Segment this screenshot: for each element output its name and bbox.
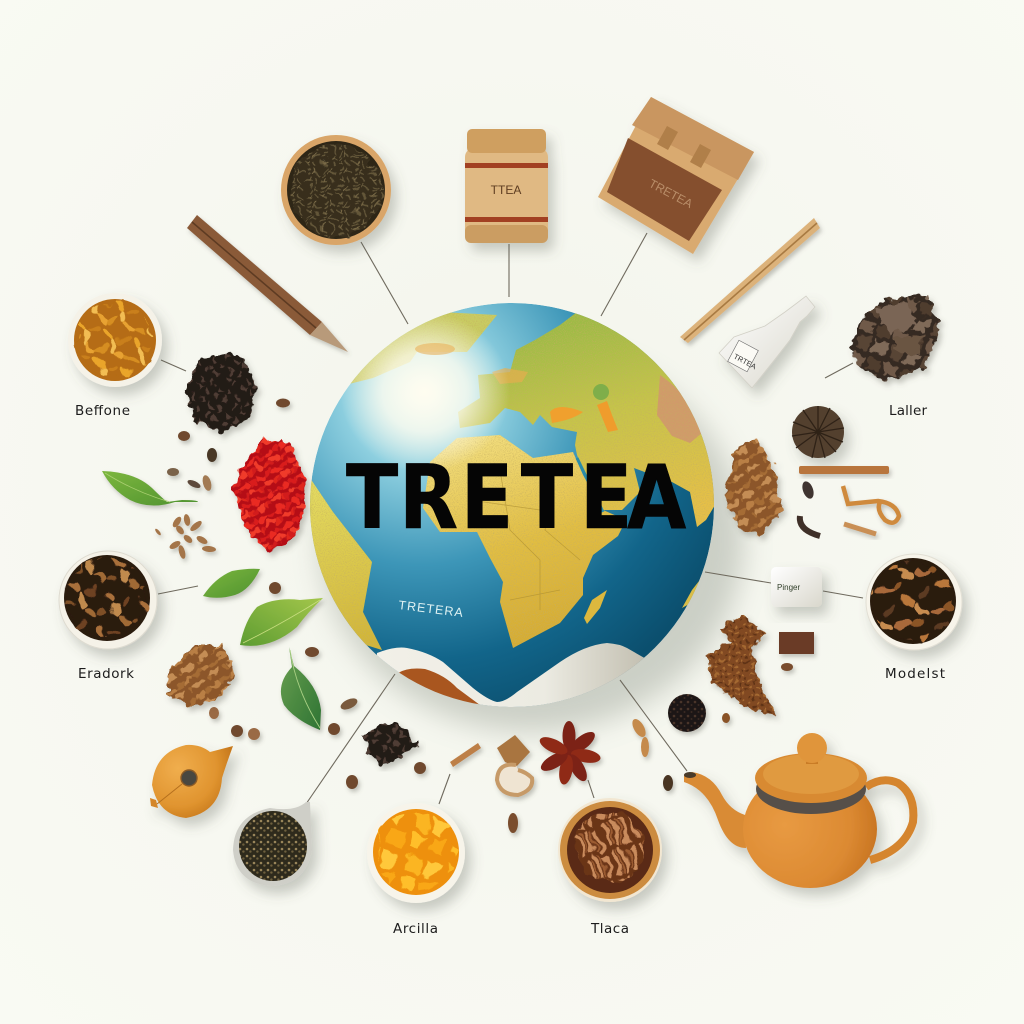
ground tea pile (706, 615, 776, 716)
sticks: right wooden pair (680, 218, 820, 343)
package: tea box (598, 97, 754, 254)
cinnamon stick (799, 466, 889, 474)
knob (806, 750, 818, 764)
tin: small white: Pinger (777, 583, 800, 592)
clove upper (800, 480, 816, 500)
label: Tlaca: Tlaca (590, 921, 629, 937)
tan highlands (657, 375, 703, 443)
orange patch: Caspian (597, 401, 618, 432)
Red Sea (577, 458, 603, 512)
spice: star anise (537, 721, 602, 786)
jar: tea jar (465, 129, 548, 243)
bottle: white (719, 296, 815, 388)
wrap inner brown (399, 668, 480, 704)
jar: tea jar: TTEA (491, 183, 521, 197)
small ginger (844, 524, 876, 534)
handle (866, 780, 913, 860)
herb: dark cluster bottom (365, 722, 418, 765)
cinnamon and spices: right cluster (726, 406, 899, 536)
polar highlight (344, 316, 507, 466)
continent: South America (310, 480, 382, 650)
leaf: small (203, 569, 260, 598)
orange patches: Europe (492, 368, 528, 384)
island: Madagascar (584, 590, 607, 624)
globe shadow (320, 348, 744, 732)
herb: brown flakes (726, 440, 783, 535)
label text: Beffone (75, 403, 130, 419)
gourd: orange teapot small (150, 745, 233, 818)
spice: almond pieces (630, 717, 649, 757)
leaf: medium (240, 598, 323, 646)
herb: dark tea pile left (186, 352, 258, 433)
spout (684, 772, 746, 848)
bowl: dark tea, top (281, 135, 391, 245)
orange patch: Black Sea area (550, 407, 583, 423)
bowl: dark spice right (866, 554, 962, 650)
continent: North America and Greenland (345, 312, 497, 385)
bowl: mango slices (367, 803, 465, 903)
spice: ginger pieces (497, 735, 532, 795)
bowl: golden tea (68, 293, 162, 387)
seeds: scattered coffee-like beans (167, 398, 793, 833)
package: tea box: TRETEA (647, 176, 695, 211)
orange patch: Greenland (415, 343, 455, 355)
clove lower (800, 516, 820, 536)
stick: small cinnamon (450, 743, 481, 767)
leaf: dark lower (281, 647, 321, 730)
title: TRETEA (346, 447, 686, 549)
herb: dark bark pile right (850, 294, 940, 380)
stick: left wooden pencil (187, 215, 348, 352)
spice: dark pinecone (792, 406, 844, 458)
connector lines (158, 233, 863, 804)
ginger root (843, 486, 899, 523)
label group: Beffone (68, 293, 162, 419)
bottle: white: TRTEA (732, 352, 758, 371)
globe bottom wrap (376, 643, 644, 707)
body (743, 770, 877, 888)
scattered flakes (154, 514, 216, 560)
globe small label: TRETERA (398, 598, 465, 620)
spoon: tea spoon (233, 802, 312, 886)
label: Arcilla: Arcilla (393, 921, 438, 937)
bowl: rust spice (558, 798, 662, 902)
leaf: upper left (102, 471, 198, 506)
continent: Africa (423, 435, 626, 648)
Africa borders (482, 476, 580, 610)
collar band (756, 764, 866, 814)
chocolate square (779, 632, 814, 654)
label: Laller: Laller (889, 403, 927, 419)
lid (755, 753, 867, 803)
tin: small white (771, 567, 822, 607)
round dark spice (668, 694, 706, 732)
bowl: brown spice left (59, 551, 157, 649)
herb: root pile (168, 645, 236, 706)
continent: Australia edge (682, 580, 700, 608)
label: Modelst: Modelst (885, 666, 945, 682)
green patch (593, 384, 609, 400)
continent: Europe and Asia (458, 312, 718, 527)
label: Eradork: Eradork (78, 666, 134, 682)
globe (300, 303, 718, 730)
berries: red goji (232, 440, 305, 552)
teapot: large orange (684, 733, 913, 888)
